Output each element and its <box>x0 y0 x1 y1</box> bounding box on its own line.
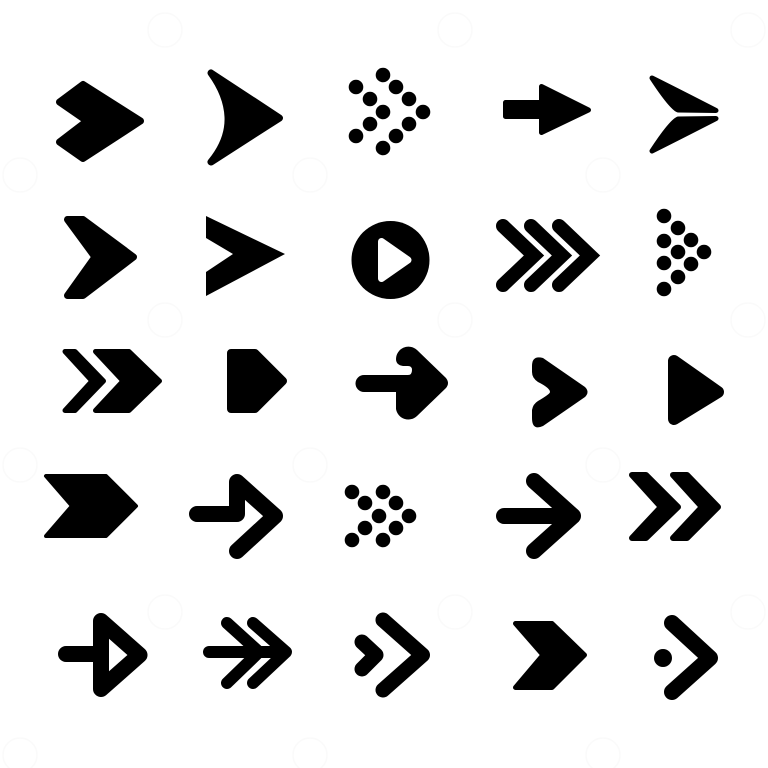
icon: wide chevron arrowhead <box>68 220 134 296</box>
icon: bold arrow with lobed head <box>356 347 448 419</box>
icon: rounded notched arrowhead <box>532 357 588 427</box>
icon: triple chevrons <box>503 226 590 285</box>
icon: pentagon tag arrow <box>231 353 283 409</box>
icon: bold double chevron <box>632 475 718 538</box>
icon: sharp notched arrowhead <box>206 216 285 296</box>
icon: wide chevron block <box>46 476 136 536</box>
icon: dotted diamond arrow small <box>345 485 416 547</box>
icon: play button circle <box>352 221 430 299</box>
icon: thin and thick double chevron <box>65 352 160 410</box>
icon: line arrow <box>504 481 573 551</box>
icon: chevron block <box>516 624 584 688</box>
icon: dotted diamond arrow <box>349 68 430 155</box>
icon: notched block arrow <box>60 84 140 158</box>
icon: stepped line arrow <box>197 482 275 551</box>
icon: small and large chevrons <box>362 620 422 690</box>
icon: dot and chevron <box>654 623 710 692</box>
icon: solid arrow with short shaft <box>506 86 588 132</box>
icon: feathered double-head arrow <box>209 623 286 683</box>
icon: rounded play triangle <box>674 361 718 419</box>
icon: curved-back arrowhead <box>211 73 280 162</box>
icon: outlined triangle arrow with shaft <box>66 621 140 689</box>
icon: dotted triangle arrow <box>657 209 711 296</box>
icon: split navigation arrow <box>652 78 716 151</box>
